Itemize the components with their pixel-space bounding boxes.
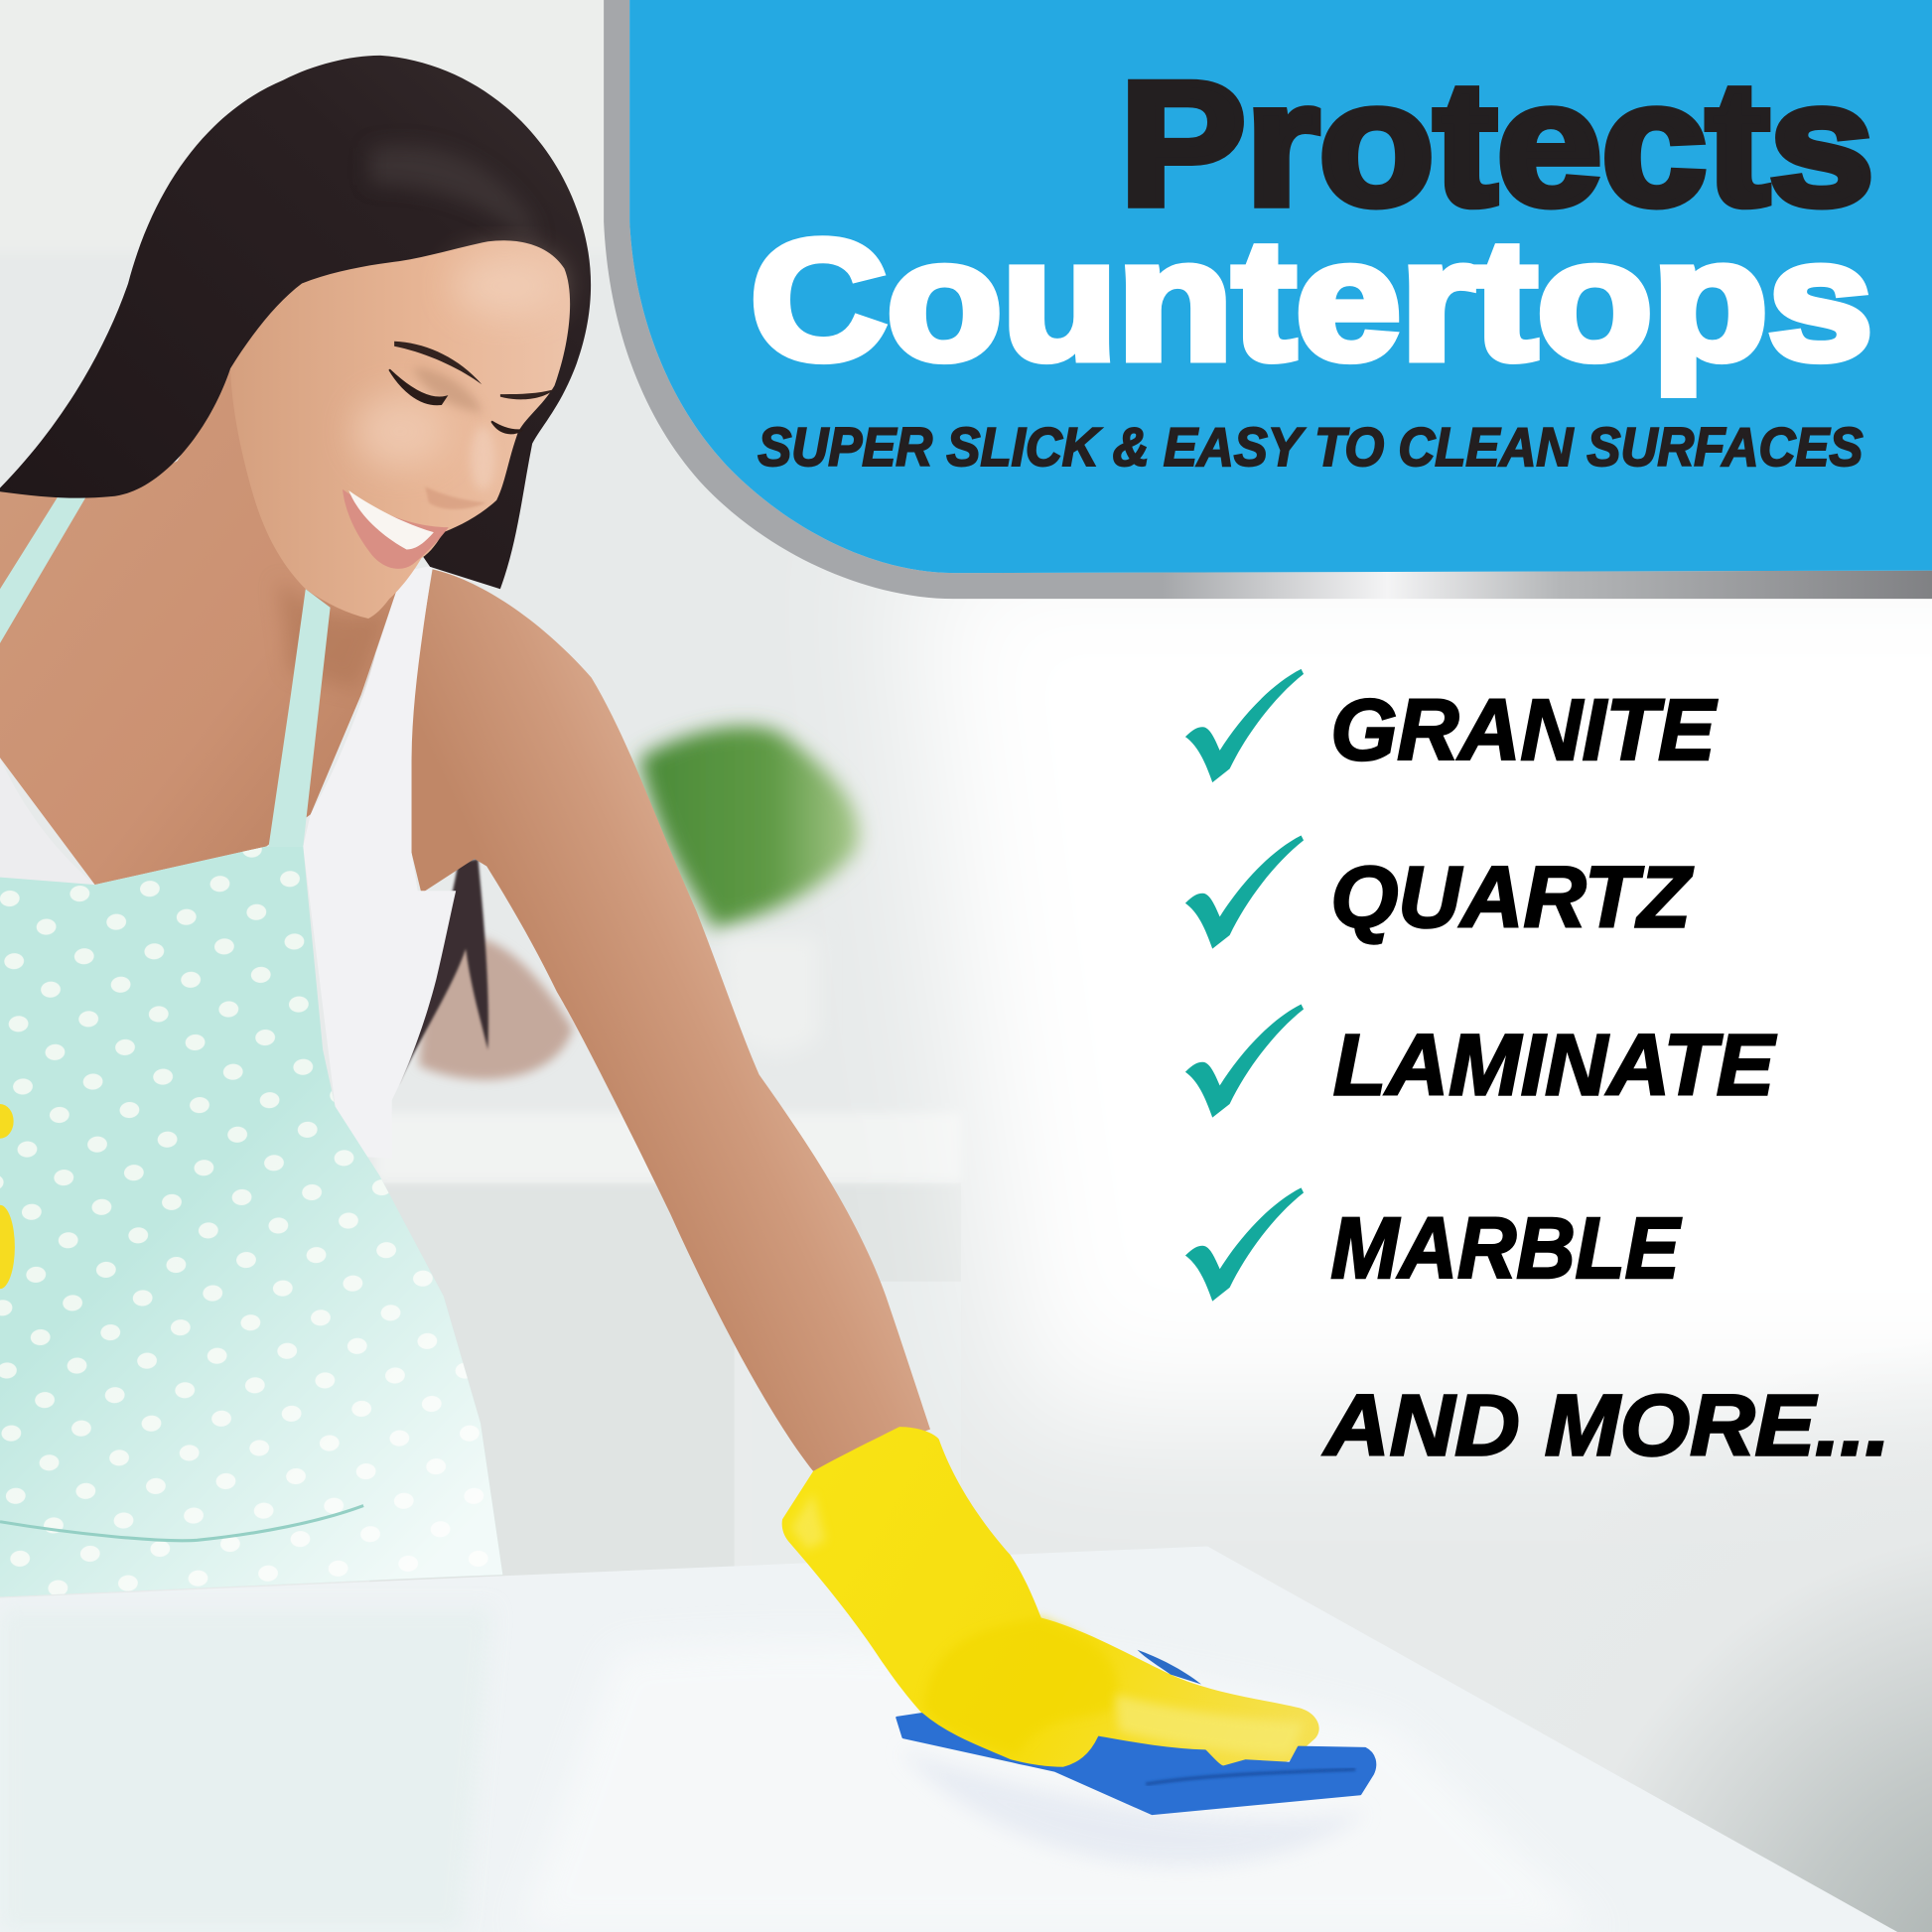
glove (782, 1427, 1319, 1768)
face highlights (353, 256, 557, 490)
label: and more: AND MORE... (1322, 1378, 1890, 1474)
woman wiping the counter (0, 56, 1319, 1768)
label: quartz: QUARTZ (1330, 849, 1694, 945)
hair highlight (369, 145, 536, 246)
blue microfiber cloth (897, 1650, 1375, 1814)
title: Protects: Protects (1120, 46, 1874, 241)
blurred plant and vase (419, 726, 859, 1079)
arm (412, 569, 930, 1471)
face (230, 240, 570, 619)
hair strands behind arm (398, 859, 488, 1084)
label: marble: MARBLE (1330, 1200, 1682, 1297)
tank top left (0, 758, 95, 885)
neck shadow (277, 579, 394, 690)
yellow spray bottle fingers (0, 1104, 15, 1289)
icon: check mark (1185, 835, 1304, 949)
checklist (1185, 669, 1890, 1474)
label: laminate: LAMINATE (1333, 1018, 1777, 1114)
item: granite (1185, 669, 1719, 782)
eyebrow (394, 342, 554, 399)
nose shadow (425, 486, 486, 509)
subtitle: SUPER SLICK & EASY TO CLEAN SURFACES (758, 417, 1863, 478)
item: laminate (1185, 1004, 1777, 1118)
item: marble (1185, 1187, 1682, 1302)
counter top (0, 1547, 1897, 1932)
smile (343, 489, 449, 569)
icon: check mark (1185, 1004, 1304, 1118)
white tank top (303, 566, 456, 1159)
item: quartz (1185, 835, 1694, 949)
apron (0, 496, 502, 1596)
icon: check mark (1185, 1187, 1304, 1302)
icon: check mark (1185, 669, 1304, 782)
eyes (389, 369, 522, 433)
head hair (0, 56, 591, 589)
panel: blue header (629, 0, 1932, 573)
label: granite: GRANITE (1330, 682, 1719, 778)
neck and chest (0, 368, 403, 885)
title: Countertops: Countertops (751, 206, 1872, 395)
panel: silver border (604, 0, 1932, 599)
